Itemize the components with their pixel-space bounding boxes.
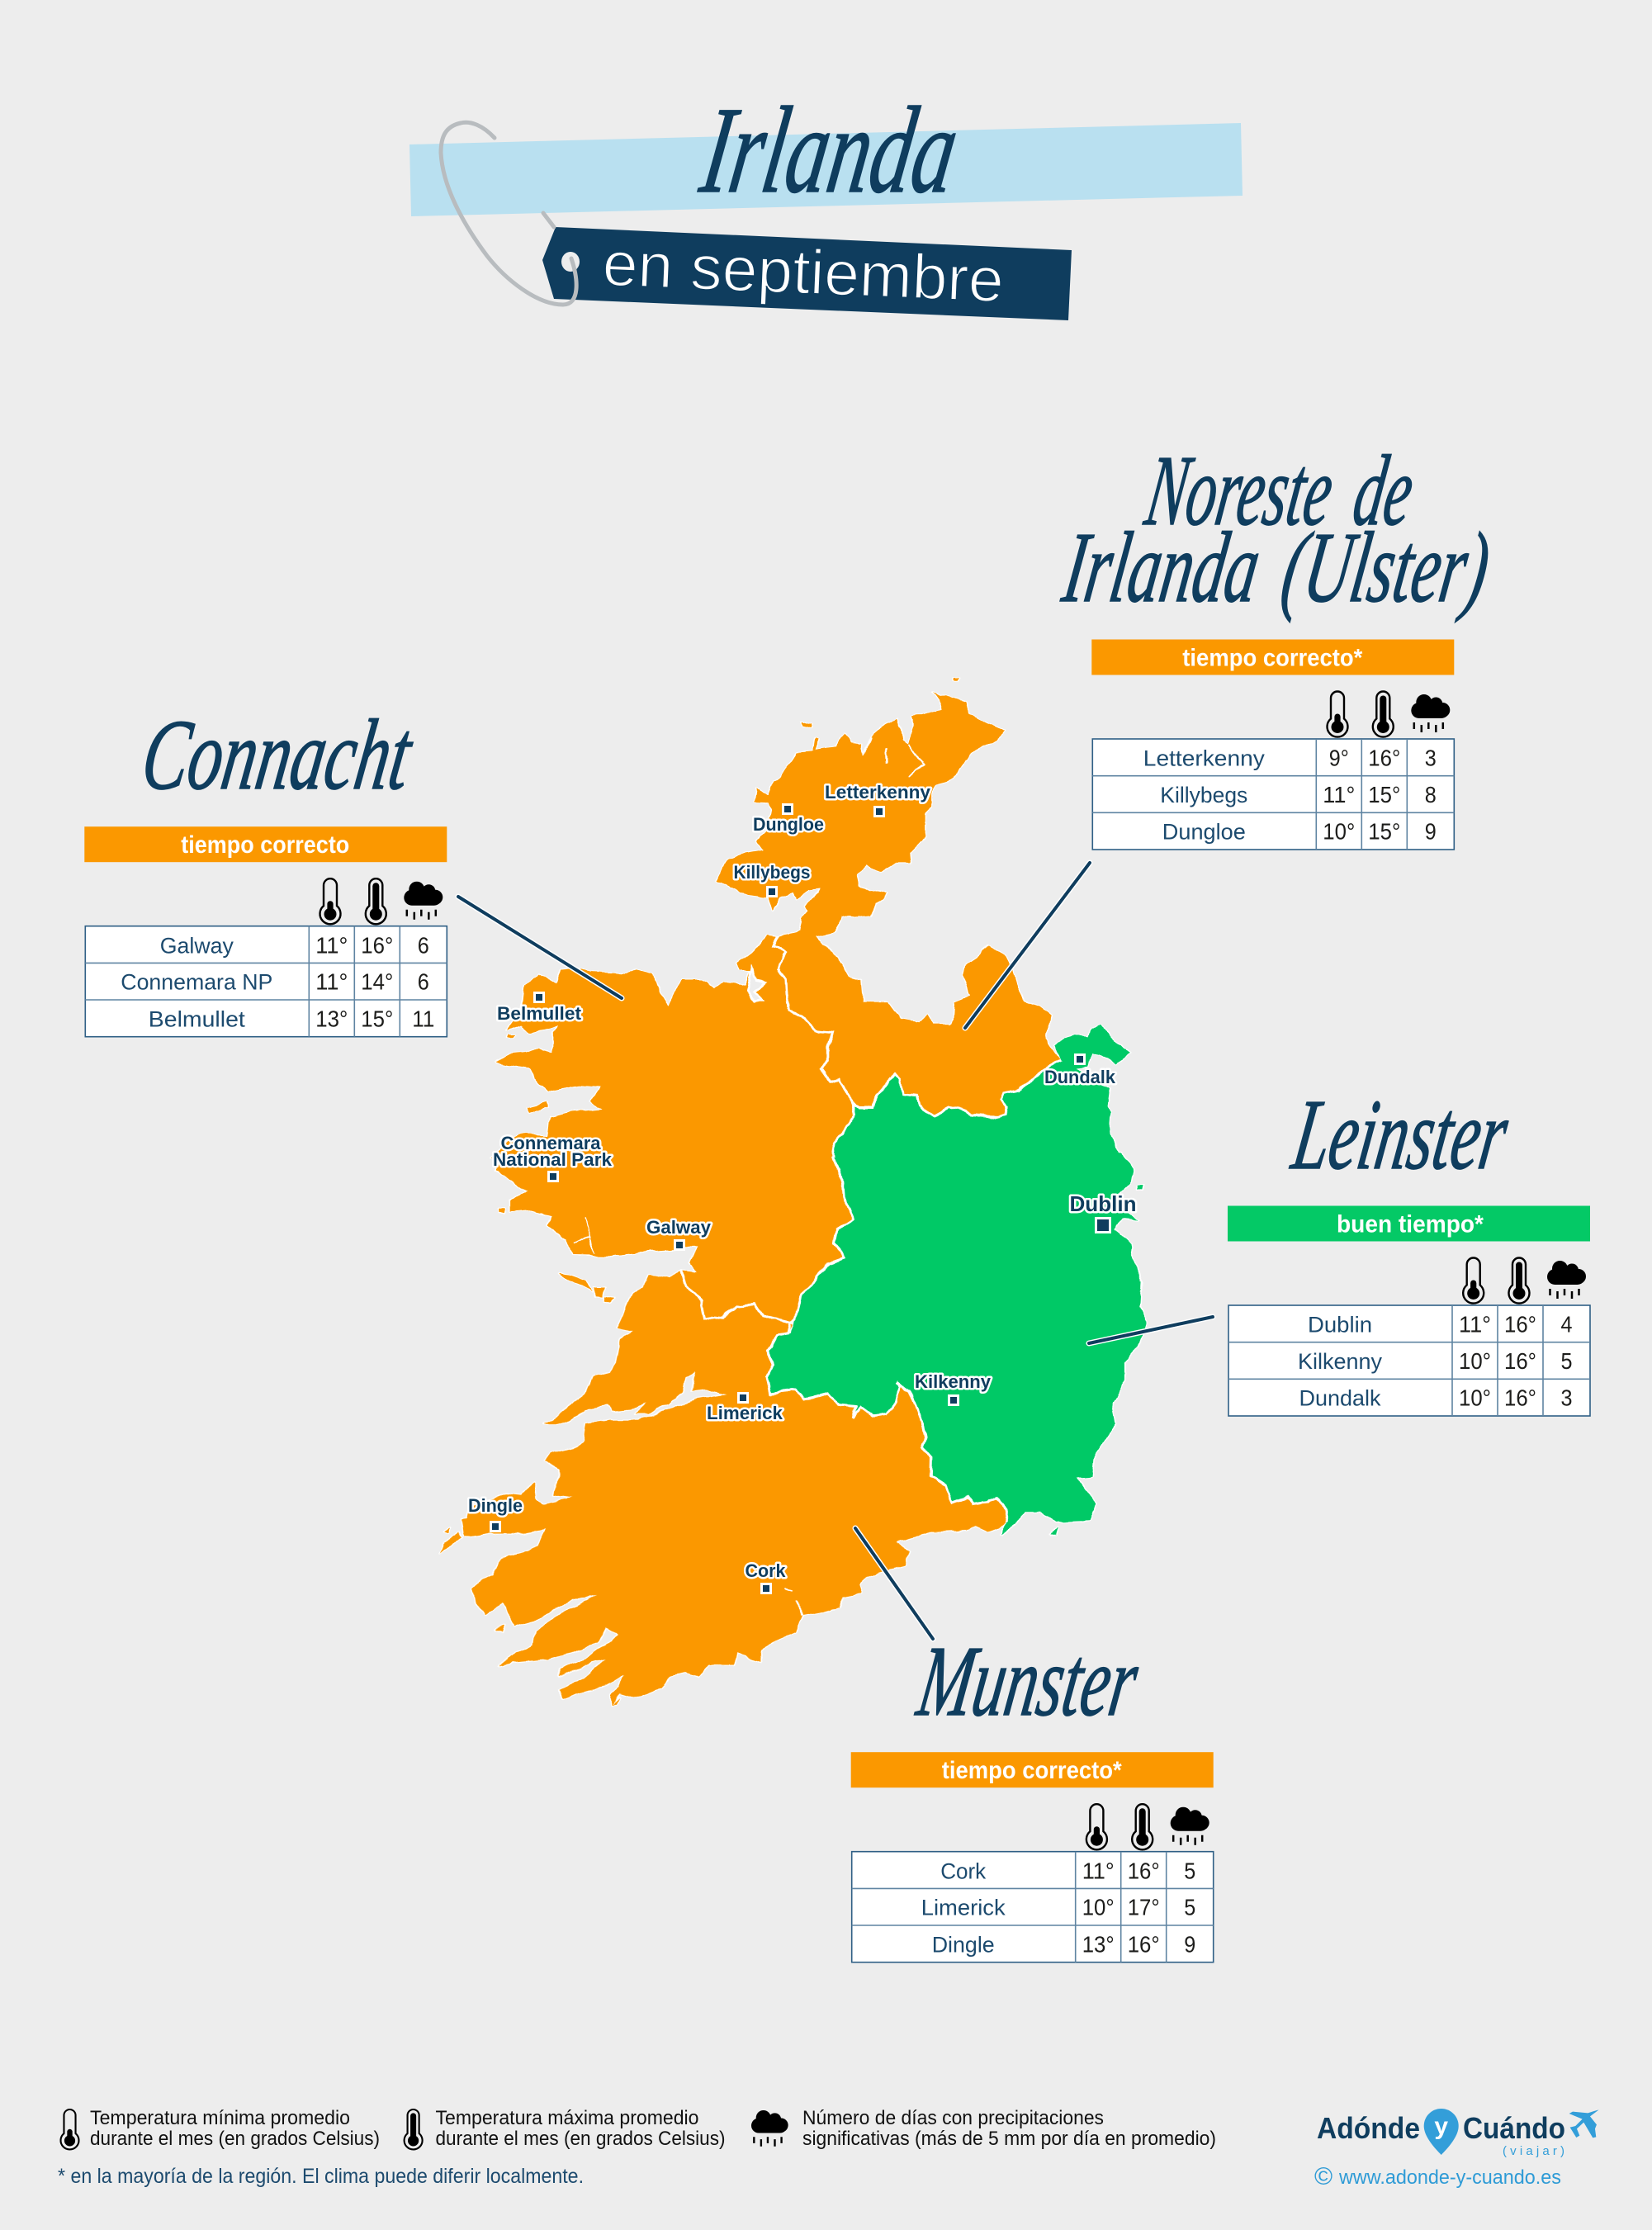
- panel: Ulster: Killybegs: [1160, 783, 1247, 807]
- logo text: Adónde: Adónde: [1317, 2111, 1420, 2145]
- panel: Ulster: Dungloe: [1162, 820, 1246, 845]
- panel: Ulster: 3: [1425, 746, 1437, 771]
- panel: Connacht: 6: [418, 932, 429, 958]
- bar label: tiempo correcto: [181, 831, 349, 859]
- icons: [320, 878, 340, 924]
- panel: Leinster: 16°: [1504, 1348, 1536, 1374]
- region title: Connacht: Connacht: [135, 699, 420, 811]
- website: www.adonde-y-cuando.es: [1338, 2166, 1561, 2189]
- region boundaries north: [747, 736, 1061, 1157]
- panel: Munster: Limerick: [921, 1896, 1006, 1920]
- panel: Leinster: 11°: [1459, 1312, 1491, 1338]
- panel: Munster: 16°: [1128, 1931, 1160, 1957]
- panel: Munster: 17°: [1128, 1895, 1160, 1920]
- legend text: maximum temperature: durante el mes (en grados Celsius): [436, 2128, 725, 2150]
- icon: maximum temperature: [405, 2109, 423, 2149]
- bar label: buen tiempo*: [1337, 1210, 1484, 1238]
- table: [1228, 1305, 1590, 1416]
- logo subtext: (viajar): [1503, 2144, 1564, 2158]
- city labels: Connemara: [500, 1133, 601, 1153]
- region: Connacht: [491, 934, 856, 1322]
- panel: Ulster: 8: [1425, 782, 1437, 807]
- panel: Munster: Cork: [940, 1858, 987, 1883]
- city labels: Belmullet: [497, 1003, 582, 1024]
- icons: [1086, 1804, 1107, 1849]
- title block: [409, 82, 1243, 320]
- panel: Munster: 16°: [1128, 1858, 1160, 1883]
- panel: Connacht: Belmullet: [149, 1006, 245, 1031]
- city labels: Dundalk: [1044, 1067, 1116, 1087]
- panel: Munster: [851, 1752, 1214, 1962]
- legend text: minimum temperature: durante el mes (en grados Celsius): [90, 2128, 380, 2150]
- panel: Leinster: 10°: [1459, 1385, 1491, 1411]
- map shapes: [440, 678, 1146, 1705]
- panel: Munster: 9: [1184, 1931, 1195, 1957]
- subtitle: en septiembre: en septiembre: [601, 229, 1005, 315]
- icon: map pin: [1424, 2109, 1459, 2155]
- region: Leinster: [767, 1027, 1146, 1536]
- panel: Ulster: 15°: [1368, 782, 1400, 807]
- region boundaries south: [575, 1156, 1008, 1617]
- logo: [1314, 2109, 1599, 2190]
- panel: Connacht: [84, 826, 447, 1037]
- city labels: Dublin: [1070, 1191, 1136, 1216]
- panel: Munster: 10°: [1082, 1895, 1115, 1920]
- panel: Connacht: 11: [412, 1006, 434, 1031]
- subtitle tag: [542, 227, 1072, 320]
- city labels: [468, 782, 1136, 1581]
- region: Munster: [440, 1270, 1007, 1705]
- panel: Connacht: 15°: [361, 1006, 393, 1031]
- panel: Munster: 5: [1184, 1895, 1195, 1920]
- panel: Leinster: Kilkenny: [1298, 1349, 1382, 1374]
- city markers: [490, 804, 1110, 1593]
- legend text: minimum temperature: Temperatura mínima promedio: [90, 2107, 350, 2129]
- city labels: National Park: [493, 1149, 613, 1170]
- panel: Leinster: [1228, 1205, 1590, 1416]
- city labels: Letterkenny: [825, 782, 931, 803]
- table: [1092, 739, 1454, 850]
- icons: [1328, 692, 1347, 737]
- bar label: tiempo correcto*: [942, 1757, 1122, 1784]
- icon: rain cloud: [751, 2110, 788, 2147]
- icons: [1463, 1258, 1484, 1304]
- tag string: [441, 122, 576, 305]
- panel: Connacht: 13°: [315, 1006, 348, 1031]
- map of Ireland: [440, 678, 1146, 1705]
- panel: Munster: 11°: [1082, 1858, 1115, 1883]
- legend: [61, 2107, 1216, 2150]
- panel: Leinster: Dublin: [1308, 1313, 1372, 1338]
- panel: Connacht: 11°: [315, 969, 348, 995]
- panel: Connacht: 6: [418, 969, 429, 995]
- legend text: maximum temperature: Temperatura máxima promedio: [436, 2107, 698, 2129]
- legend text: minimum temperature: [90, 2107, 380, 2150]
- copyright symbol: ©: [1314, 2163, 1332, 2190]
- logo letter: y: y: [1434, 2113, 1448, 2140]
- panel: Leinster: 16°: [1504, 1312, 1536, 1338]
- panel: Leinster: 5: [1560, 1348, 1572, 1374]
- weather bar: [851, 1752, 1214, 1787]
- panel: Ulster: 9: [1425, 819, 1437, 845]
- panel: Ulster: 16°: [1368, 746, 1400, 771]
- panel: Munster: 13°: [1082, 1931, 1115, 1957]
- weather bar: [84, 826, 447, 862]
- panel: Leinster: 4: [1560, 1312, 1572, 1338]
- legend text: maximum temperature: [436, 2107, 725, 2150]
- panel: Connacht: 16°: [361, 932, 393, 958]
- city labels: Killybegs: [733, 862, 811, 883]
- panel: Connacht: Galway: [160, 933, 234, 958]
- bar label: tiempo correcto*: [1182, 644, 1363, 672]
- icon: plane: [1569, 2109, 1599, 2138]
- footnote: * en la mayoría de la región. El clima puede diferir localmente.: [58, 2165, 584, 2188]
- panel: Ulster: 9°: [1329, 746, 1349, 771]
- icon: minimum temperature: [61, 2109, 79, 2149]
- region title: Noreste de Irlanda (Ulster): Noreste de: [1138, 435, 1421, 547]
- panel: Ulster: [1091, 639, 1454, 850]
- panel: Ulster: 15°: [1368, 819, 1400, 845]
- panel: Munster: Dingle: [932, 1932, 995, 1957]
- city labels: Dungloe: [753, 814, 824, 835]
- weather bar: [1228, 1205, 1590, 1242]
- panel: Munster: 5: [1184, 1858, 1195, 1883]
- city labels: Limerick: [707, 1403, 783, 1423]
- table: [85, 926, 447, 1037]
- weather bar: [1091, 639, 1454, 675]
- title band: [409, 123, 1243, 216]
- panel: Connacht: 11°: [315, 932, 348, 958]
- panel: Ulster: Letterkenny: [1143, 746, 1265, 771]
- panel: Connacht: Connemara NP: [121, 970, 272, 995]
- panel: Leinster: 10°: [1459, 1348, 1491, 1374]
- city labels: Galway: [646, 1217, 712, 1238]
- panel: Connacht: 14°: [361, 969, 393, 995]
- panel: Ulster: 11°: [1323, 782, 1355, 807]
- panel: Ulster: 10°: [1323, 819, 1355, 845]
- city labels: Kilkenny: [915, 1371, 992, 1392]
- tag hole: [561, 252, 580, 272]
- region title: Noreste de Irlanda (Ulster): [1056, 435, 1497, 623]
- callout lines: [458, 863, 1213, 1639]
- legend text: rain days: Número de días con precipitaciones: [802, 2107, 1104, 2129]
- region title: Leinster: Leinster: [1285, 1079, 1516, 1191]
- panel: Leinster: Dundalk: [1299, 1386, 1381, 1411]
- logo text: Cuándo: Cuándo: [1463, 2111, 1565, 2145]
- region title: Munster: Munster: [910, 1626, 1146, 1737]
- panel: Leinster: 3: [1560, 1385, 1572, 1411]
- panel: Leinster: 16°: [1504, 1385, 1536, 1411]
- table: [852, 1852, 1214, 1962]
- city labels: Cork: [745, 1560, 786, 1581]
- coast halo: [440, 678, 1146, 1705]
- legend text: rain days: significativas (más de 5 mm por día en promedio): [802, 2128, 1216, 2150]
- city labels: Dingle: [468, 1495, 523, 1516]
- title: Irlanda: Irlanda: [693, 82, 967, 219]
- region: Ulster: [716, 678, 1061, 1117]
- legend text: rain days: [802, 2107, 1216, 2150]
